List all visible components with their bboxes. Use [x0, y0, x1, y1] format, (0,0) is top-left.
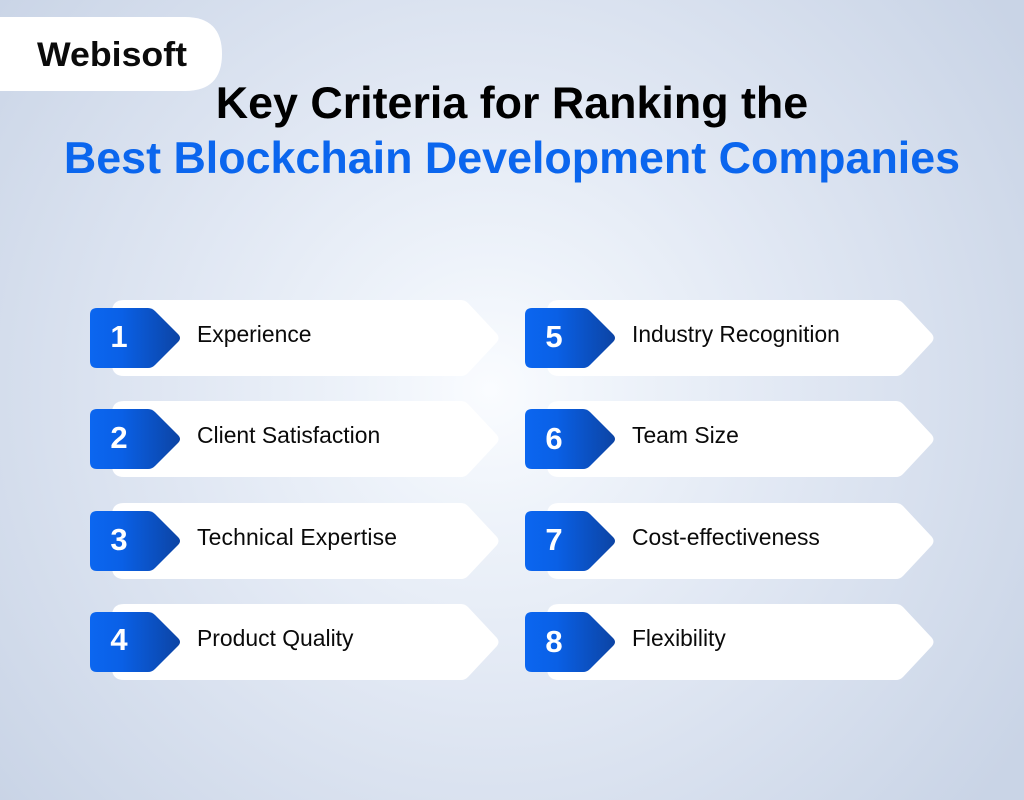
item 1: Experience: Experience [197, 321, 312, 347]
item 8: Flexibility: Flexibility [632, 625, 726, 651]
item 8: Flexibility: 8 [545, 624, 563, 659]
item 6: Team Size: 6 [545, 421, 563, 456]
item 5: Industry Recognition: 5 [545, 319, 563, 354]
item 2: Client Satisfaction: 2 [110, 420, 128, 455]
item 4: Product Quality: 4 [110, 622, 128, 657]
item 2: Client Satisfaction: Client Satisfaction [197, 422, 380, 448]
item 3: Technical Expertise: Technical Expertise [197, 524, 397, 550]
item 5: Industry Recognition [525, 300, 934, 376]
item 5: Industry Recognition: Industry Recognition [632, 321, 840, 347]
item 7: Cost-effectiveness: Cost-effectiveness [632, 524, 820, 550]
title [64, 78, 960, 183]
item 4: Product Quality [90, 604, 498, 680]
item 1: Experience [90, 300, 498, 376]
item 6: Team Size [525, 401, 934, 477]
item 4: Product Quality: Product Quality [197, 625, 354, 651]
item 6: Team Size: Team Size [632, 422, 739, 448]
item 3: Technical Expertise: 3 [110, 522, 128, 557]
logo: Webisoft [0, 17, 222, 91]
item 3: Technical Expertise [90, 503, 498, 579]
item 1: Experience: 1 [110, 319, 128, 354]
item 2: Client Satisfaction [90, 401, 498, 477]
title: Key Criteria for Ranking the [216, 78, 808, 128]
title: Best Blockchain Development Companies [64, 133, 960, 183]
item 7: Cost-effectiveness: 7 [545, 522, 563, 557]
item 8: Flexibility [525, 604, 934, 680]
item 7: Cost-effectiveness [525, 503, 934, 579]
logo: Webisoft: Webisoft [37, 36, 187, 74]
